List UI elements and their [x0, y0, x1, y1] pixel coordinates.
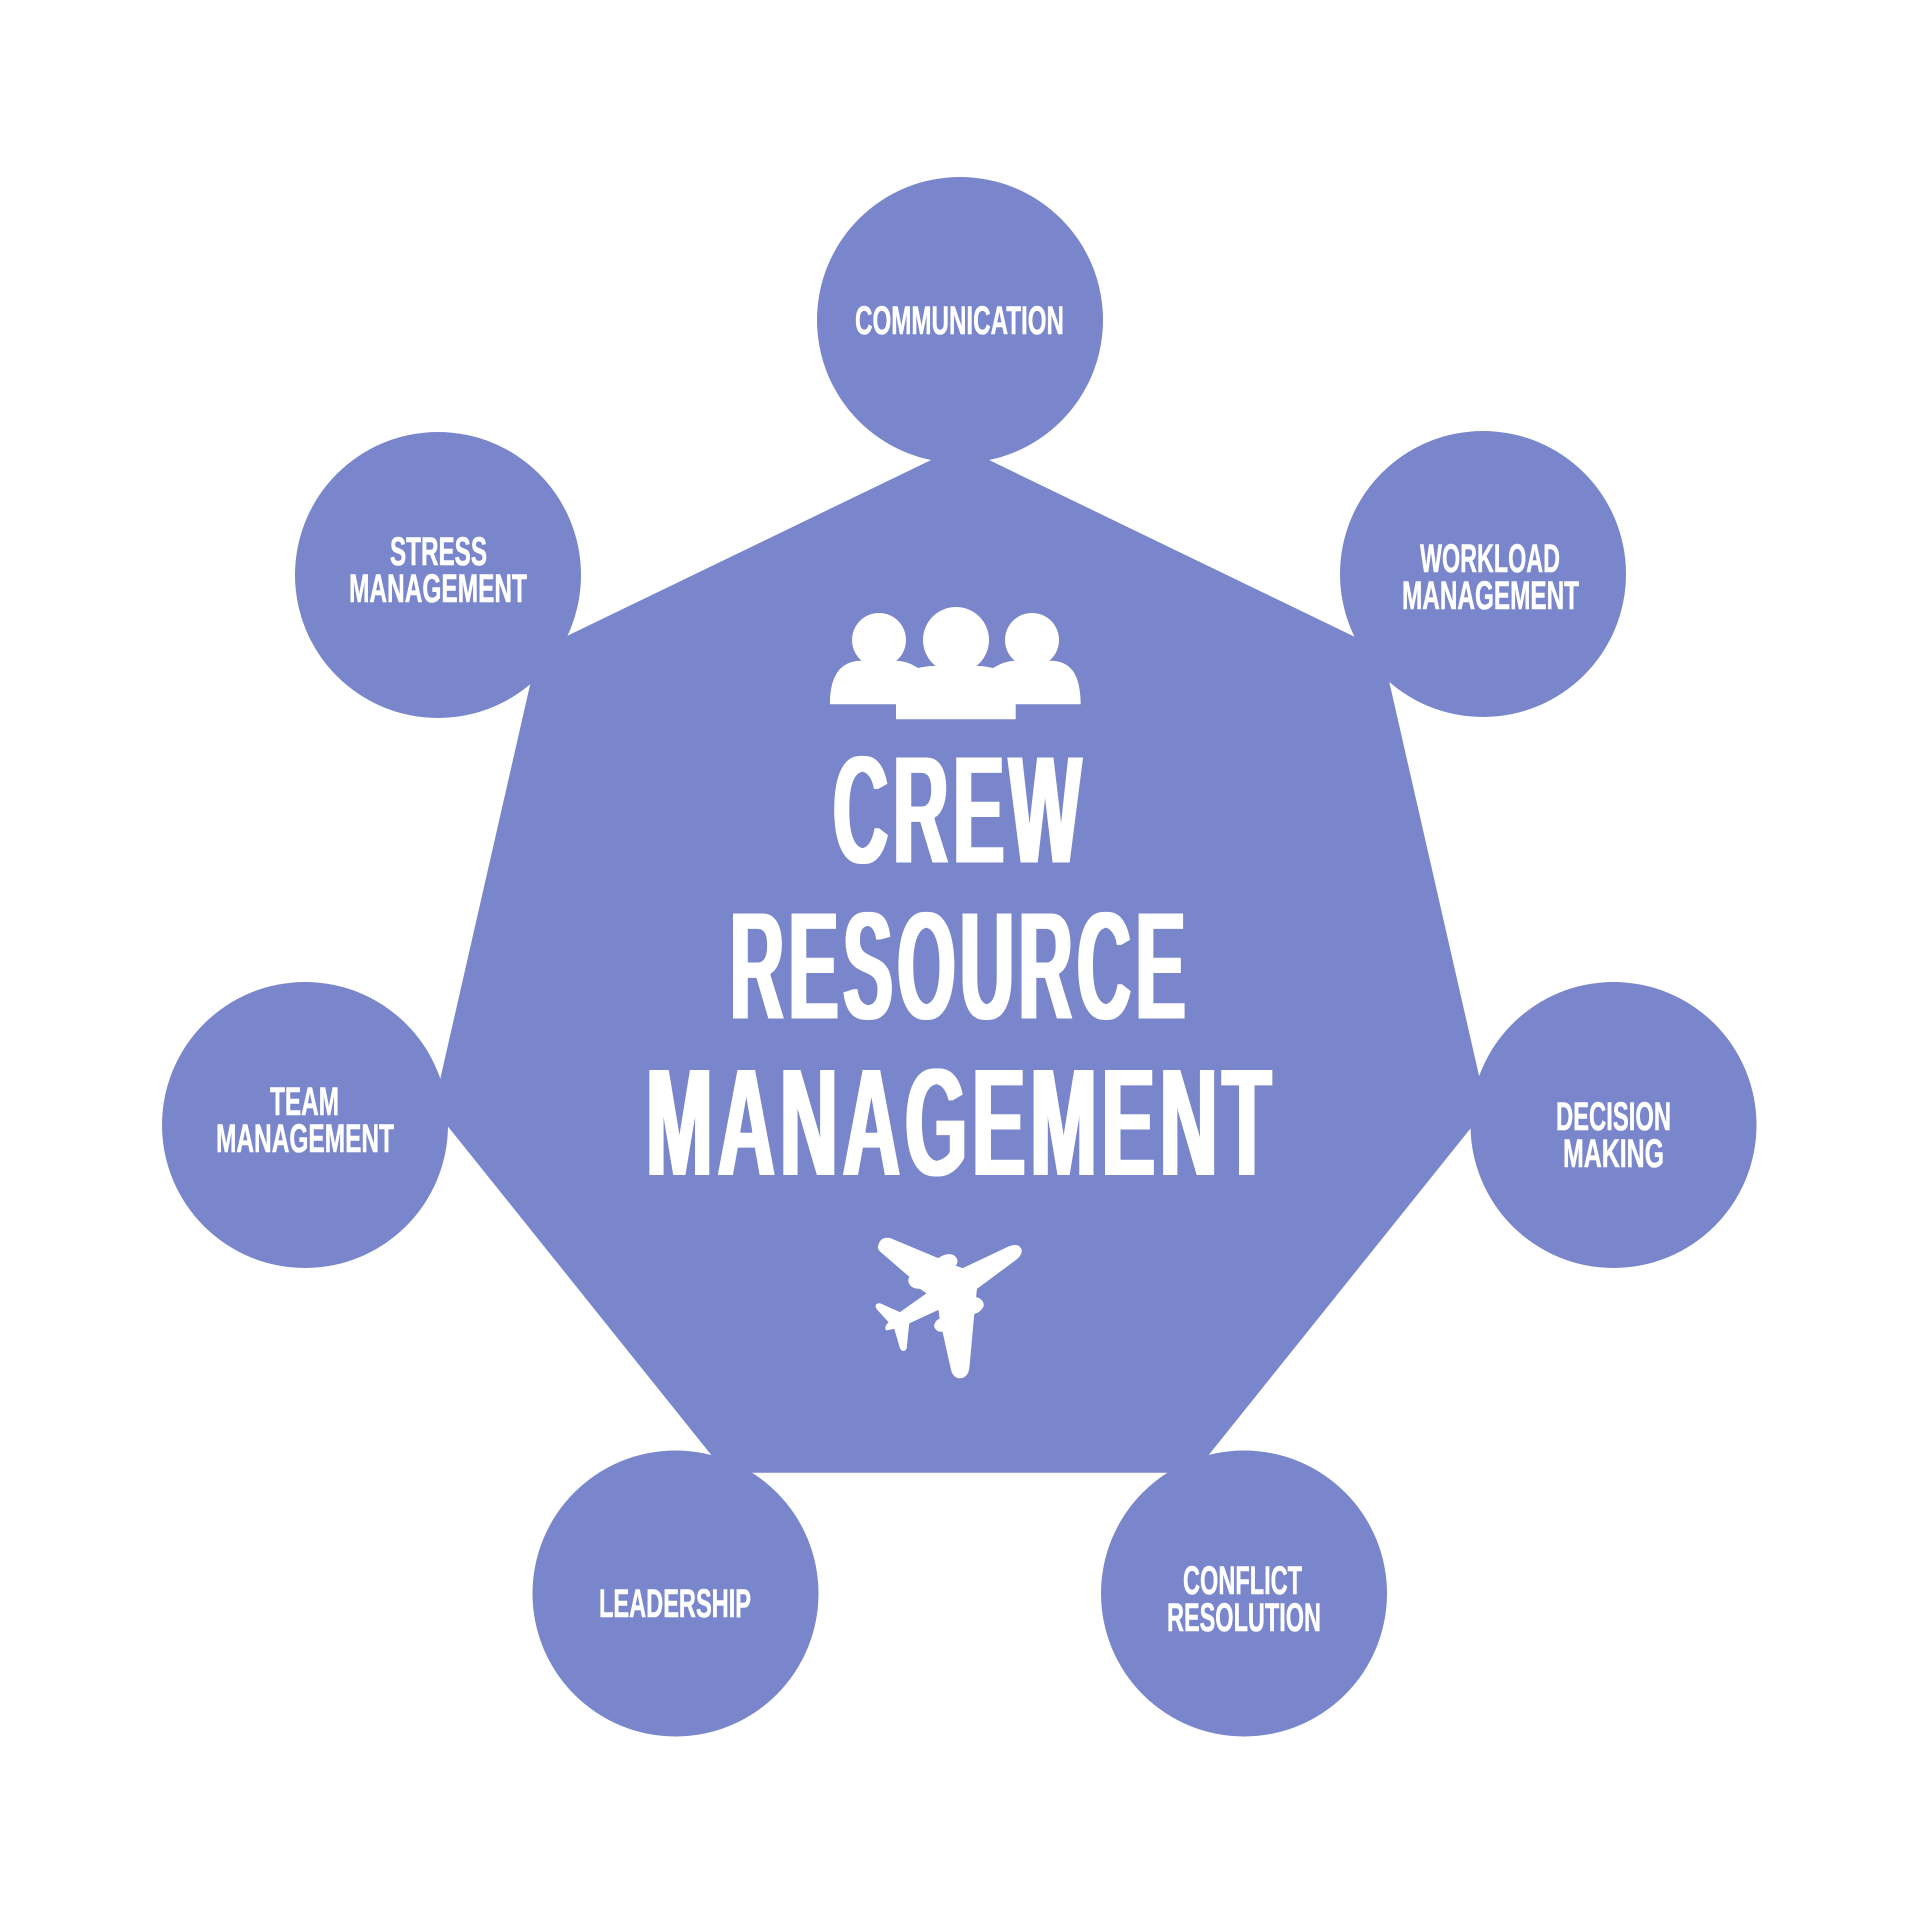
node: team management: TEAM	[270, 1080, 339, 1124]
node: workload management	[1340, 431, 1626, 717]
node: workload management: WORKLOAD	[1420, 537, 1560, 581]
node: stress management	[295, 432, 581, 718]
node: stress management: MANAGEMENT	[349, 567, 527, 611]
icon: three crew members	[830, 607, 1081, 719]
node: stress management: STRESS	[390, 530, 487, 574]
central heptagon panel	[434, 446, 1486, 1473]
node: conflict resolution: RESOLUTION	[1167, 1596, 1321, 1640]
title: crew resource management	[646, 722, 1276, 1209]
node: team management	[162, 982, 448, 1268]
node: communication	[817, 177, 1103, 463]
title: crew resource management: CREW	[833, 722, 1086, 896]
node: leadership	[532, 1450, 818, 1736]
node: communication: COMMUNICATION	[855, 299, 1064, 343]
node: conflict resolution	[1101, 1450, 1387, 1736]
node: leadership: LEADERSHIP	[599, 1582, 751, 1626]
node: decision making: DECISION	[1556, 1095, 1671, 1139]
node: conflict resolution: CONFLICT	[1183, 1559, 1302, 1603]
node: workload management: MANAGEMENT	[1402, 574, 1579, 618]
node: team management: MANAGEMENT	[216, 1117, 394, 1161]
title: crew resource management: RESOURCE	[730, 878, 1190, 1052]
title: crew resource management: MANAGEMENT	[646, 1035, 1276, 1209]
node: decision making: MAKING	[1563, 1132, 1664, 1176]
node: decision making	[1470, 982, 1756, 1268]
icon: airplane	[877, 1239, 1021, 1377]
